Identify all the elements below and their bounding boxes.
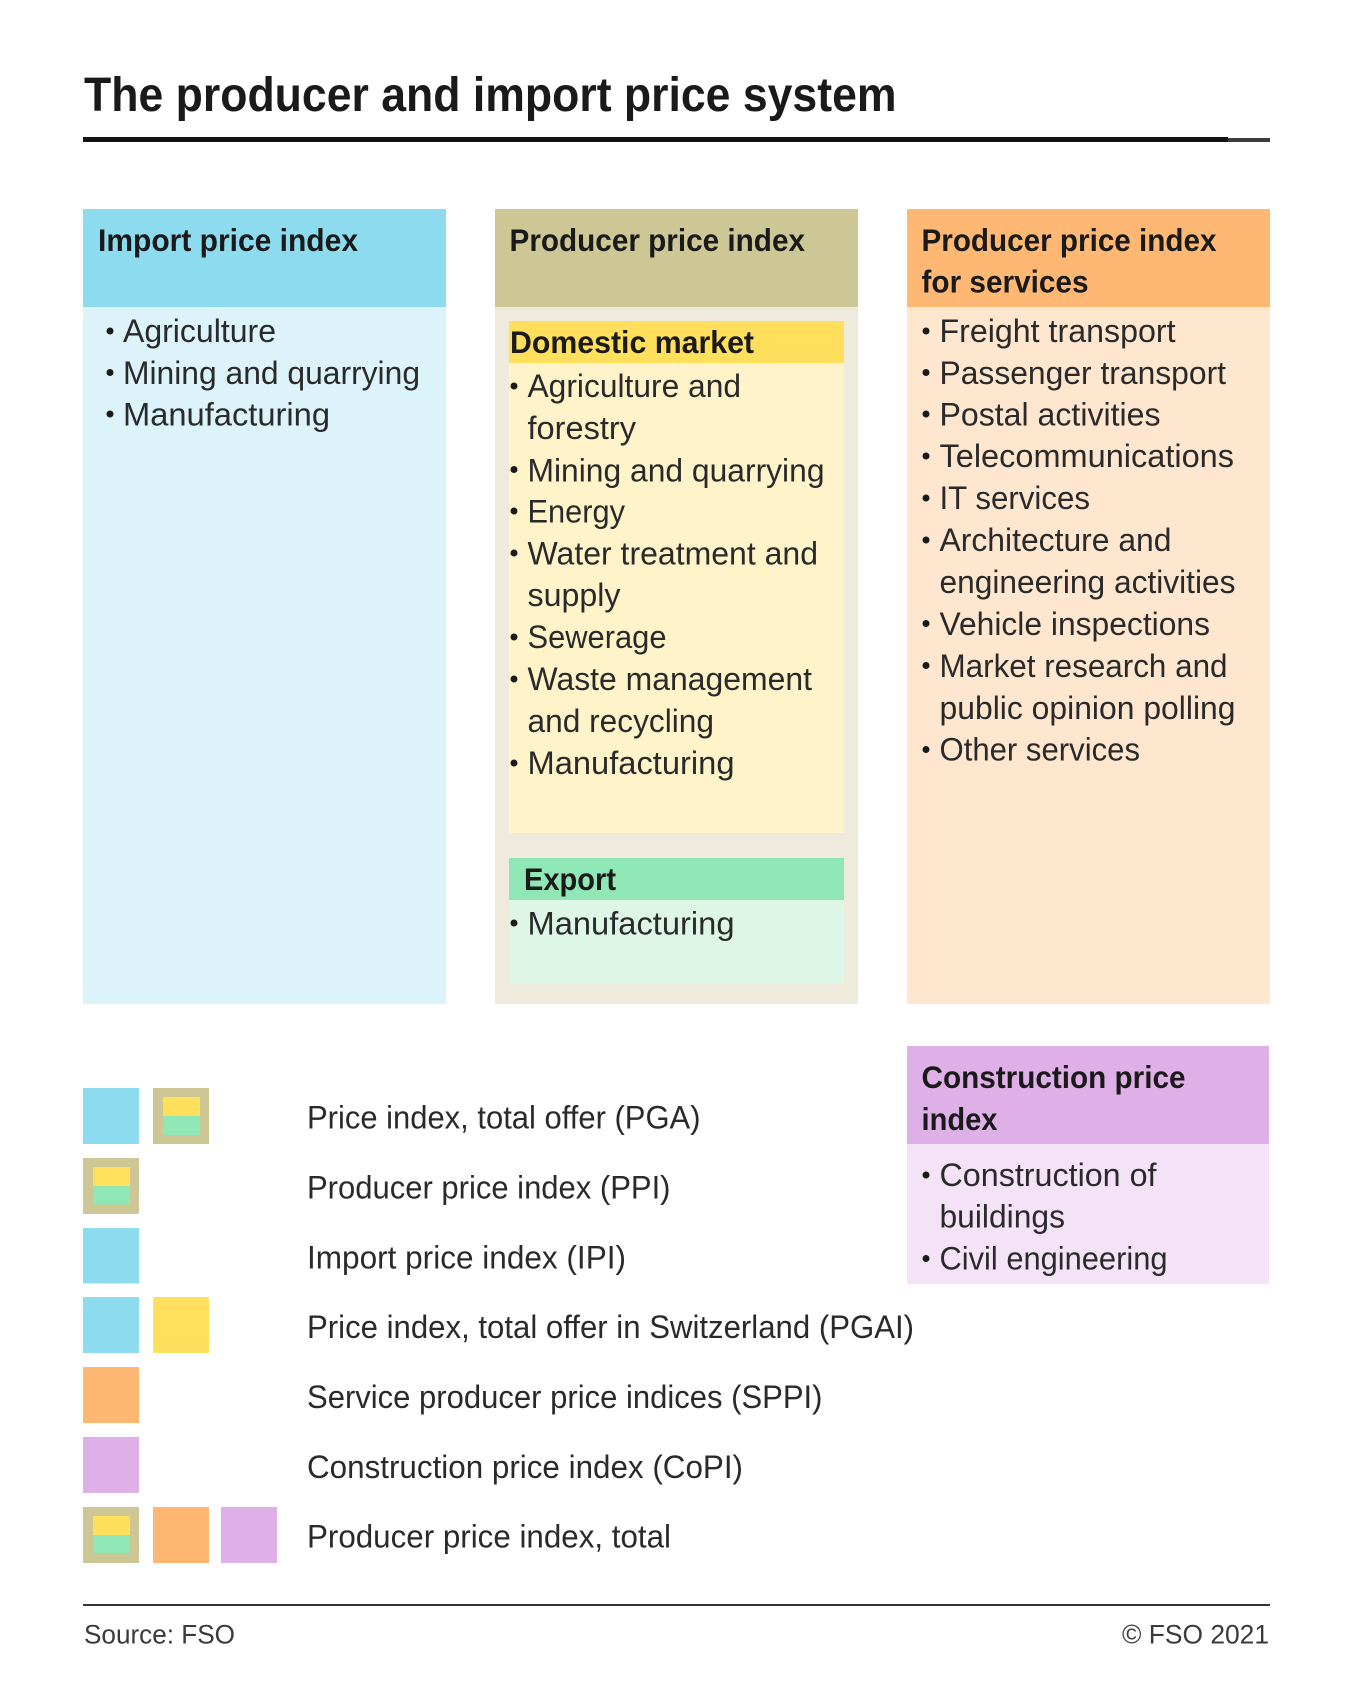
heading: producer price index for services: Producer price index	[922, 222, 1217, 258]
legend	[83, 1088, 914, 1563]
list: service sectors	[922, 313, 1236, 768]
legend row: SPPI	[83, 1367, 822, 1423]
title: The producer and import price system	[84, 69, 896, 122]
list: domestic market sectors: Energy	[528, 494, 625, 530]
list: service sectors: Passenger transport	[940, 355, 1226, 391]
legend row: CoPI	[83, 1437, 743, 1493]
heading: producer price index for services	[907, 209, 1270, 307]
panel: import price index	[83, 209, 446, 1004]
list: service sectors: Market research and	[940, 648, 1228, 684]
heading: construction price index: index	[922, 1101, 998, 1137]
copyright: © FSO 2021	[1122, 1620, 1269, 1650]
legend row: PGA: Price index, total offer (PGA)	[307, 1100, 700, 1136]
sub-panel: domestic market: Domestic market	[510, 324, 754, 360]
list: domestic market sectors: forestry	[528, 410, 636, 446]
list: service sectors: public opinion polling	[940, 690, 1236, 726]
list: domestic market sectors: Sewerage	[528, 619, 666, 655]
list: service sectors: Freight transport	[940, 313, 1176, 349]
list: import sectors: Mining and quarrying	[123, 355, 420, 391]
list: service sectors: Telecommunications	[940, 438, 1234, 474]
list: domestic market sectors: Water treatment and	[528, 536, 818, 572]
sub-panel: export: Export	[524, 861, 616, 897]
list: construction sectors: Construction of	[940, 1157, 1157, 1193]
legend row: PGAI	[83, 1297, 914, 1353]
legend row: PGAI: Price index, total offer in Switzerland (PGAI)	[307, 1309, 914, 1345]
list: domestic market sectors: and recycling	[528, 703, 714, 739]
heading: construction price index	[907, 1046, 1269, 1144]
list: domestic market sectors: Waste management	[528, 661, 812, 697]
legend row: PPI	[83, 1158, 670, 1214]
list: construction sectors	[922, 1157, 1168, 1276]
footer rule	[83, 1604, 1270, 1606]
title rule	[83, 137, 1270, 142]
panel: producer price index for services	[907, 209, 1270, 1004]
panel: construction price index	[907, 1046, 1269, 1284]
list: service sectors: Architecture and	[940, 522, 1172, 558]
sub-panel: domestic market	[509, 321, 844, 833]
panel: producer price index	[495, 209, 858, 1004]
list: service sectors: Other services	[940, 732, 1140, 768]
list: construction sectors: Civil engineering	[940, 1240, 1168, 1276]
heading: producer price index	[495, 209, 858, 307]
list: import sectors	[106, 313, 420, 432]
list: domestic market sectors: Manufacturing	[528, 745, 734, 781]
legend row: SPPI: Service producer price indices (SPPI)	[307, 1379, 822, 1415]
heading: construction price index: Construction price	[922, 1059, 1186, 1095]
legend row: total	[83, 1507, 671, 1563]
list: domestic market sectors: Mining and quarrying	[528, 452, 824, 488]
list: domestic market sectors: supply	[528, 577, 620, 613]
list: domestic market sectors: Agriculture and	[528, 368, 741, 404]
heading: import price index: Import price index	[98, 222, 358, 258]
legend row: PGA	[83, 1088, 700, 1144]
list: service sectors: Vehicle inspections	[940, 606, 1210, 642]
legend row: CoPI: Construction price index (CoPI)	[307, 1449, 743, 1485]
legend row: IPI	[83, 1228, 626, 1284]
list: domestic market sectors	[510, 368, 824, 781]
heading: producer price index for services: for services	[922, 264, 1088, 300]
sub-panel: export	[509, 858, 844, 984]
list: import sectors: Manufacturing	[123, 396, 330, 432]
list: construction sectors: buildings	[940, 1198, 1065, 1234]
list: import sectors: Agriculture	[123, 313, 276, 349]
legend row: PPI: Producer price index (PPI)	[307, 1170, 670, 1206]
legend row: total: Producer price index, total	[307, 1518, 671, 1554]
heading: import price index	[83, 209, 446, 307]
legend row: IPI: Import price index (IPI)	[307, 1240, 626, 1276]
sub-panel: export: Manufacturing	[528, 906, 734, 942]
list: service sectors: Postal activities	[940, 396, 1160, 432]
source note: Source: FSO	[84, 1620, 235, 1650]
heading: producer price index: Producer price index	[510, 222, 805, 258]
list: service sectors: engineering activities	[940, 564, 1236, 600]
list: service sectors: IT services	[940, 480, 1090, 516]
